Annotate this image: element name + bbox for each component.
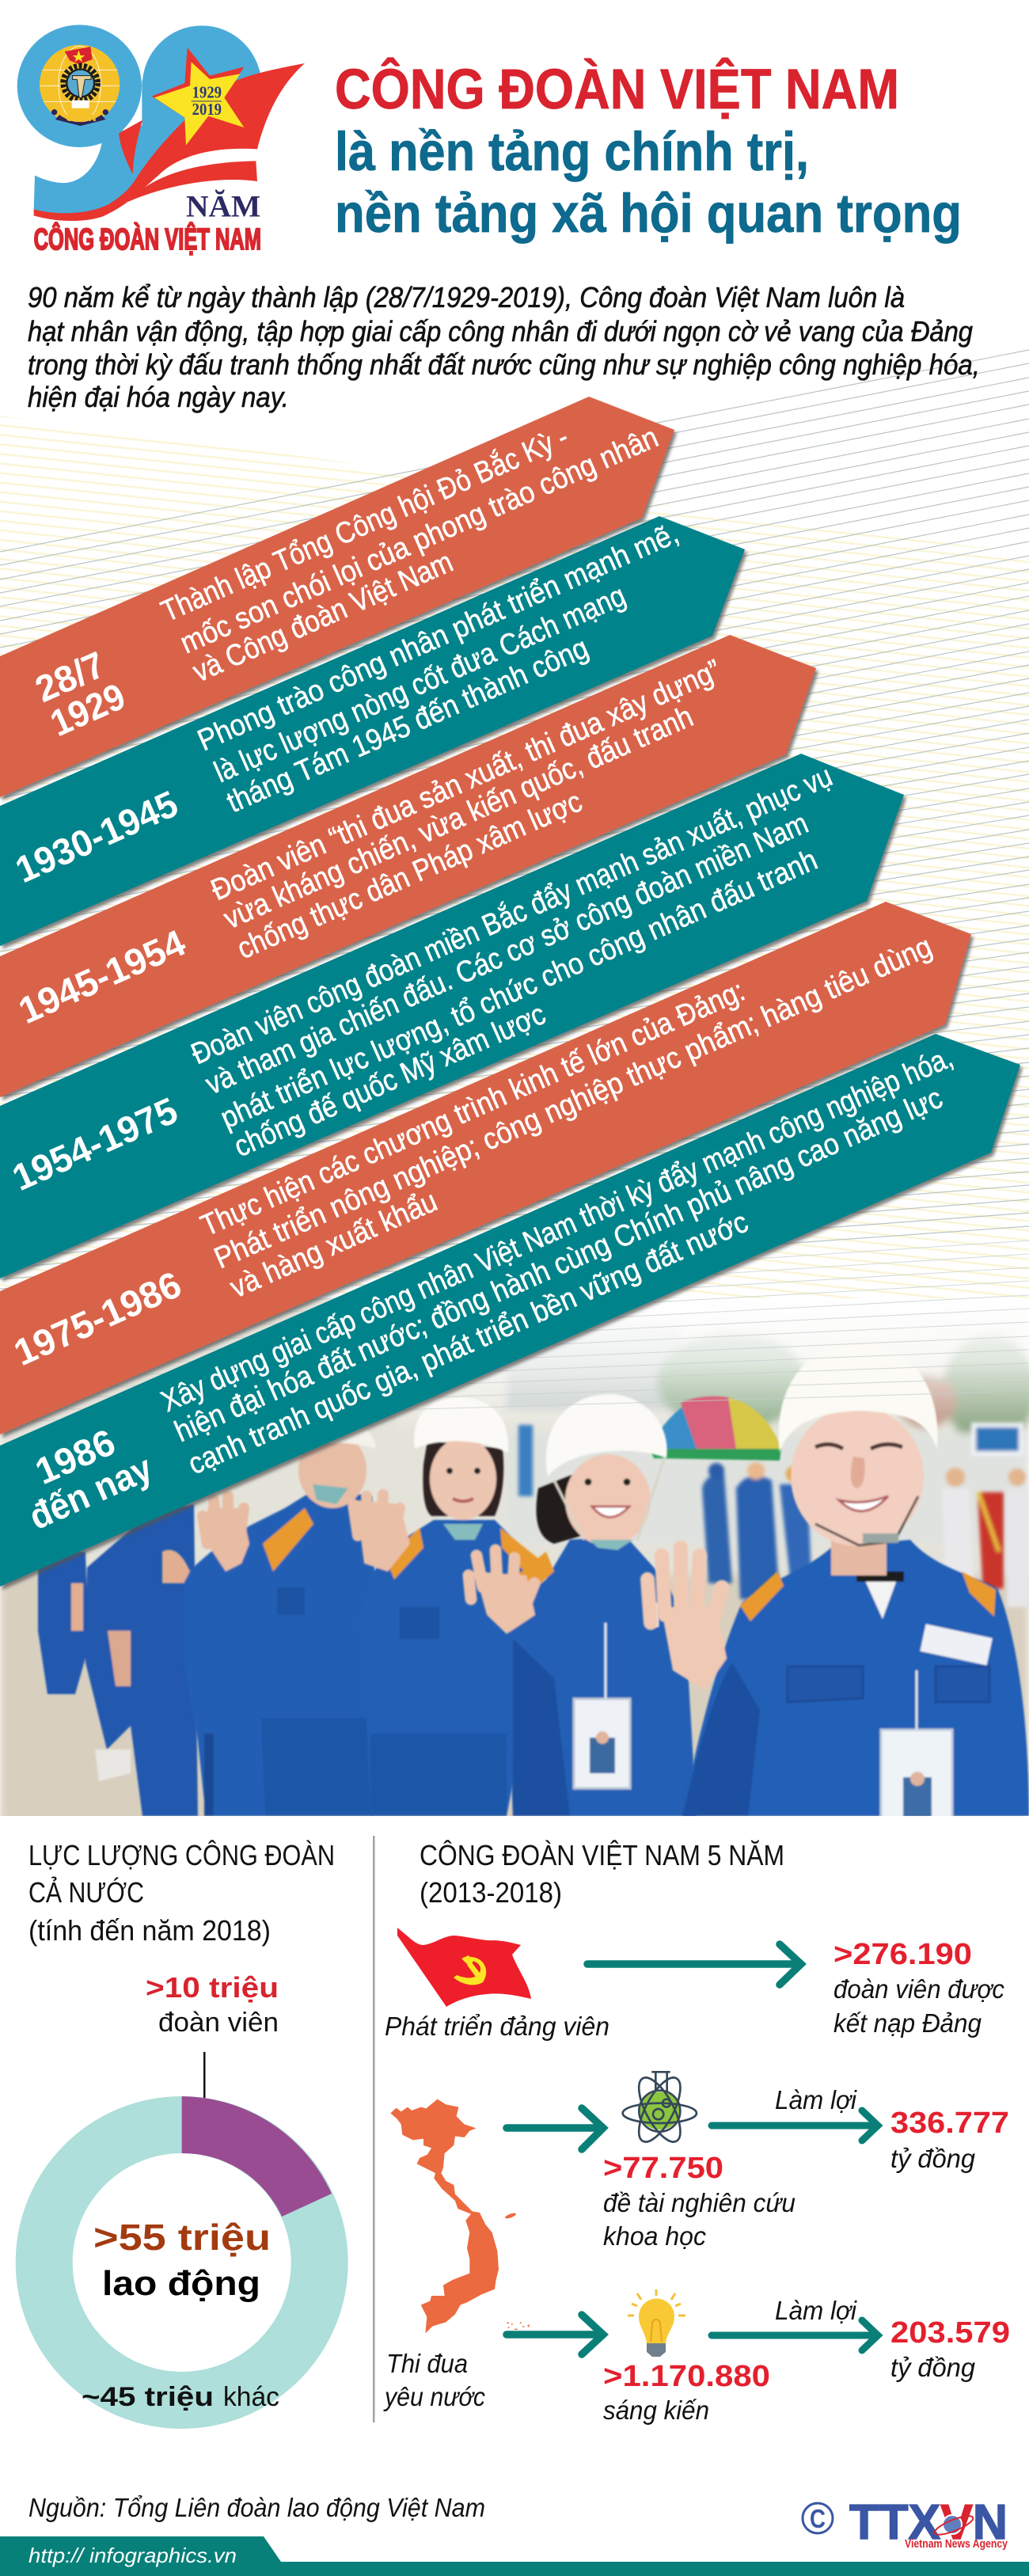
label: làm lợi 2: Làm lợi: [775, 2296, 858, 2325]
donut other label: khác: [223, 2382, 279, 2412]
photo: worker 2: [469, 1394, 697, 1816]
logo: blue numeral 90: [17, 25, 261, 215]
stat: sáng kiến: sáng kiến: [603, 2396, 709, 2425]
icon: Vietnam map: [390, 2099, 530, 2333]
band 1 text: và Công đoàn Việt Nam: [188, 545, 458, 689]
timeline band 3: 1945-1954: [0, 635, 816, 1097]
band 3 text: vừa kháng chiến, vừa kiến quốc, đấu tranh: [219, 700, 698, 936]
logo: star: 2019: [192, 101, 222, 119]
photo background: [0, 1298, 1029, 1829]
band 3 date: 1945-1954: [13, 921, 192, 1032]
band 1 date: 1929: [44, 674, 131, 744]
timeline band 6: 1986 đến nay: [0, 1034, 1020, 1586]
stat: đề tài: khoa học: [603, 2221, 706, 2251]
stat: đề tài: đề tài nghiên cứu: [603, 2188, 795, 2217]
stat: 203.579: tỷ đồng: [890, 2353, 976, 2382]
stat: đề tài: [603, 2152, 795, 2251]
panel heading: (tính đến năm 2018): [28, 1914, 271, 1947]
photo: workers marching: [0, 1298, 1029, 1829]
band 6 date: 1986: [29, 1420, 121, 1492]
arrow: initiatives to benefit: [712, 2320, 878, 2350]
band 4 text: và tham gia chiến đấu. Các cơ sở công đoàn miền Nam: [201, 807, 813, 1101]
logo: star: [152, 47, 244, 145]
band 1 text: mốc son chói lọi của phong trào công nhân: [176, 420, 663, 660]
stat: đề tài: >77.750: [603, 2152, 723, 2185]
icon: party flag: [397, 1928, 531, 2007]
icon: atom flask: [623, 2072, 697, 2148]
photo: far workers: [38, 1504, 198, 1816]
intro text: [28, 281, 980, 413]
band 1 text: Thành lập Tổng Công hội Đỏ Bắc Kỳ -: [156, 420, 573, 629]
photo: worker 4: [162, 1417, 380, 1816]
label: thi đua yêu nước: yêu nước: [383, 2382, 485, 2411]
band 5 text: Thực hiện các chương trình kinh tế lớn của Đảng:: [196, 975, 750, 1243]
callout: đoàn viên: đoàn viên: [158, 2008, 279, 2038]
stat: 203.579: 203.579: [890, 2316, 1010, 2350]
panel heading: LỰC LƯỢNG CÔNG ĐOÀN: [28, 1839, 335, 1871]
footer bar: [0, 2536, 1029, 2576]
stat: đảng viên: kết nạp Đảng: [833, 2008, 982, 2038]
label: thi đua yêu nước: [383, 2349, 485, 2411]
band 2 text: tháng Tám 1945 đến thành công: [222, 631, 594, 819]
photo: crowd behind: [518, 1423, 1029, 1607]
stat: 336.777: tỷ đồng: [890, 2144, 976, 2173]
label: làm lợi: Làm lợi: [775, 2085, 858, 2114]
logo: red ribbons: [34, 63, 305, 221]
stat: 336.777: [890, 2107, 1009, 2173]
label: phát triển đảng viên: Phát triển đảng viên: [385, 2012, 609, 2041]
band 4 text: chống đế quốc Mỹ xâm lược: [230, 997, 550, 1164]
panel heading: CÔNG ĐOÀN VIỆT NAM 5 NĂM: [420, 1839, 784, 1871]
band 5 text: Phát triển nông nghiệp; công nghiệp thực phẩm; hàng tiêu dùng: [210, 930, 937, 1275]
footer bar: http:// infographics.vn: [28, 2544, 237, 2567]
logo: union emblem: [40, 45, 120, 126]
stat: đảng viên: >276.190: [833, 1938, 972, 1971]
panel heading: (2013-2018): [420, 1876, 562, 1909]
panel heading: [420, 1839, 784, 1909]
logo: wordmark: CÔNG ĐOÀN VIỆT NAM: [34, 221, 261, 256]
timeline band 4: 1954-1975: [0, 754, 904, 1279]
callout: đoàn viên: [146, 1971, 279, 2113]
band 6 text: cạnh tranh quốc gia, phát triển bền vững đất nước: [184, 1206, 753, 1481]
intro text: 90 năm kể từ ngày thành lập (28/7/1929-2019), Công đoàn Việt Nam luôn là: [28, 281, 905, 313]
logo: 90 năm Công đoàn Việt Nam: [17, 25, 305, 256]
band 2 text: Phong trào công nhân phát triển mạnh mẽ,: [193, 517, 684, 758]
band 6 text: hiện đại hóa đất nước; đồng hành cùng Chính phủ nâng cao năng lực: [170, 1081, 947, 1449]
panel heading: [28, 1839, 335, 1947]
arrow: research to benefit: [712, 2111, 878, 2141]
timeline band 2: 1930-1945: [0, 516, 745, 946]
label: thi đua yêu nước: Thi đua: [386, 2349, 468, 2378]
band 2 text: là lực lượng nòng cốt đưa Cách mạng: [210, 579, 631, 789]
stat: 336.777: 336.777: [890, 2107, 1009, 2140]
stat: sáng kiến: >1.170.880: [603, 2360, 770, 2393]
stat: 203.579: [890, 2316, 1010, 2382]
panel: công đoàn việt nam 5 năm: [383, 1839, 1010, 2425]
band 4 text: Đoàn viên công đoàn miền Bắc đẩy mạnh sản xuất, phục vụ: [186, 759, 837, 1071]
timeline band 5: 1975-1986: [0, 902, 971, 1434]
band 1 date: 28/7: [29, 643, 111, 710]
stat: đảng viên: [833, 1938, 1004, 2038]
title: nền tảng xã hội quan trọng: [335, 183, 962, 244]
donut other label: ~45 triệu: [82, 2382, 214, 2412]
band 5 date: 1975-1986: [8, 1263, 188, 1373]
arrow: map to research: [507, 2108, 603, 2149]
donut other label: [82, 2382, 279, 2412]
timeline band 1: 28/7/1929: [0, 397, 674, 797]
copyright and TTXVN logo: Vietnam News Agency: [905, 2537, 1008, 2551]
intro text: hiện đại hóa ngày nay.: [28, 381, 289, 413]
photo: worker 1 front: [647, 1343, 1029, 1818]
band 6 date: đến nay: [23, 1446, 158, 1537]
donut centre label: [93, 2217, 271, 2303]
donut chart: [44, 2096, 332, 2400]
source: Nguồn: Tổng Liên đoàn lao động Việt Nam: [28, 2493, 485, 2522]
arrow: flag to result: [587, 1944, 801, 1985]
band 3 text: chống thực dân Pháp xâm lược: [233, 785, 587, 966]
donut centre label: >55 triệu: [93, 2217, 271, 2258]
photo: worker 3: [353, 1397, 545, 1816]
logo: star: 1929: [192, 84, 222, 101]
band 4 text: phát triển lực lượng, tổ chức cho công nhân đấu tranh: [216, 843, 822, 1135]
icon: light bulb: [628, 2289, 685, 2357]
copyright and TTXVN logo: C: [810, 2504, 826, 2533]
title: là nền tảng chính trị,: [335, 121, 809, 182]
donut centre label: lao động: [102, 2264, 260, 2303]
band 4 date: 1954-1975: [6, 1089, 184, 1199]
stat: đảng viên: đoàn viên được: [833, 1974, 1004, 2004]
photo: umbrella: [650, 1396, 781, 1461]
band 1 date: [29, 643, 131, 744]
copyright and TTXVN logo: TTXVN: [849, 2495, 1008, 2550]
band 5 text: và hàng xuất khẩu: [226, 1184, 442, 1305]
logo: NĂM: NĂM: [186, 188, 260, 223]
title: CÔNG ĐOÀN VIỆT NAM: [335, 58, 899, 121]
logo: union emblem: CĐVN: [66, 114, 97, 123]
stat: sáng kiến: [603, 2360, 770, 2425]
title: [335, 58, 962, 244]
band 2 date: 1930-1945: [9, 782, 184, 891]
panel: lực lượng công đoàn cả nước: [28, 1839, 335, 2412]
panel heading: CẢ NƯỚC: [28, 1876, 144, 1909]
arrow: map to initiatives: [507, 2315, 603, 2354]
band 3 text: Đoàn viên “thi đua sản xuất, thi đua xây dựng”: [207, 654, 726, 907]
callout: đoàn viên: >10 triệu: [146, 1971, 279, 2004]
